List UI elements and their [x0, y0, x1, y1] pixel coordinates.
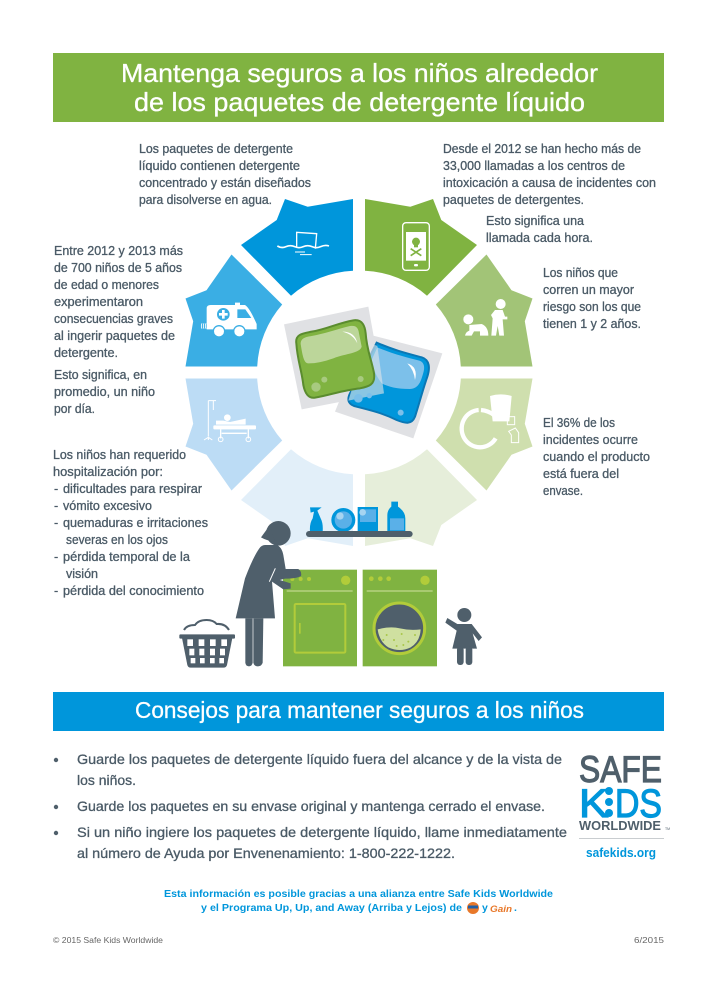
- text: concentrated detergent: Los paquetes de detergente: [139, 142, 293, 156]
- sponsor note: [164, 888, 553, 914]
- text: 700 children: detergente.: [54, 346, 118, 360]
- text: 700 children: experimentaron: [54, 295, 143, 309]
- text: hospitalization list: pérdida temporal de la: [63, 550, 190, 564]
- laundry scene: [179, 521, 482, 668]
- overlap of film on blue pod: [348, 342, 384, 401]
- text: 33,000 calls: Desde el 2012 se han hecho más de: [443, 142, 641, 156]
- icon: ambulance: [201, 303, 257, 338]
- dryer: [283, 570, 357, 666]
- text: concentrated detergent: líquido contienen detergente: [139, 159, 300, 173]
- text: 36 percent: está fuera del: [543, 467, 619, 481]
- text: concentrated detergent: concentrado y están diseñados: [139, 176, 311, 190]
- text: hospitalization list: severas en los ojos: [66, 533, 168, 547]
- plate: [331, 508, 355, 532]
- tips banner: [53, 692, 664, 731]
- text: hospitalization list: hospitalización por:: [53, 465, 163, 479]
- Gain logo: Gain: [490, 904, 513, 914]
- pod: blue: [348, 343, 429, 423]
- copyright: © 2015 Safe Kids Worldwide: [53, 936, 164, 945]
- laundry basket: [179, 620, 235, 668]
- text: hospitalization list: dificultades para respirar: [63, 482, 202, 496]
- text: hospitalization list: [53, 448, 208, 598]
- icon: phone with skull: [403, 223, 429, 270]
- text: hospitalization list: pérdida del conocimiento: [63, 584, 204, 598]
- tips list: Guarde los paquetes en su envase original y mantenga cerrado el envase.: [77, 798, 545, 814]
- text: children at risk: [543, 266, 641, 331]
- woman: [236, 521, 301, 666]
- spray bottle: [310, 507, 323, 532]
- pod: green: [296, 320, 374, 398]
- text: 36 percent: El 36% de los: [543, 416, 615, 430]
- icon: hospital bed: [204, 401, 256, 442]
- segment: palest blue: [241, 449, 353, 546]
- sponsor note: Esta información es posible gracias a una alianza entre Safe Kids Worldwide: [164, 888, 553, 900]
- segment: dark green: [365, 199, 477, 296]
- segment: dark blue: [241, 199, 353, 296]
- Safe Kids logo: SAFE: [579, 748, 662, 790]
- tips list: Si un niño ingiere los paquetes de detergente líquido, llame inmediatamente: [77, 824, 567, 840]
- Safe Kids logo: TM: [665, 827, 670, 831]
- title banner: de los paquetes de detergente líquido: [134, 87, 585, 117]
- text: hospitalization list: vómito excesivo: [63, 499, 152, 513]
- text: hospitalization list: quemaduras e irritaciones: [63, 516, 208, 530]
- Safe Kids logo: DS: [615, 782, 662, 826]
- tips list: los niños.: [77, 772, 136, 788]
- text: 700 children: consecuencias graves: [54, 312, 173, 326]
- text: 700 children: de edad o menores: [54, 278, 159, 292]
- text: children at risk: corren un mayor: [543, 283, 634, 297]
- text: hospitalization list: Los niños han requerido: [53, 448, 186, 462]
- text: 36 percent: envase.: [543, 484, 583, 498]
- text: 33,000 calls: Esto significa una: [486, 214, 584, 228]
- text: 700 children: Esto significa, en: [54, 368, 147, 382]
- text: children at risk: Los niños que: [543, 266, 618, 280]
- Safe Kids logo: safekids.org: [586, 845, 656, 860]
- icon: pie ring and packaging: [462, 394, 519, 447]
- text: hospitalization list: -: [54, 499, 58, 513]
- text: 33,000 calls: paquetes de detergentes.: [443, 193, 584, 207]
- text: 33,000 calls: [443, 142, 656, 245]
- text: 700 children: [54, 244, 183, 416]
- arm gap highlight: [269, 568, 275, 582]
- title banner: [53, 53, 664, 122]
- segment: palest green: [365, 449, 477, 546]
- segment: light green: [436, 378, 532, 490]
- text: 33,000 calls: llamada cada hora.: [486, 231, 593, 245]
- text: concentrated detergent: para disolverse en agua.: [139, 193, 272, 207]
- text: 36 percent: incidentes ocurre: [543, 433, 638, 447]
- small bubbles on the blue pod: [354, 393, 372, 403]
- Tide logo: [467, 902, 479, 914]
- text: hospitalization list: -: [54, 482, 58, 496]
- text: 700 children: promedio, un niño: [54, 385, 155, 399]
- text: hospitalization list: -: [54, 550, 58, 564]
- sponsor note: .: [514, 902, 517, 914]
- text: hospitalization list: visión: [66, 567, 98, 581]
- tips banner: Consejos para mantener seguros a los niños: [135, 697, 584, 723]
- sponsor note: y: [482, 902, 488, 914]
- Safe Kids logo: [579, 748, 670, 860]
- wrapper: blue pod film: [335, 334, 442, 438]
- wheel icons and detergent pods: [201, 223, 519, 537]
- text: children at risk: riesgo son los que: [543, 300, 641, 314]
- tips list: [54, 751, 567, 861]
- text: 33,000 calls: intoxicación a causa de incidentes con: [443, 176, 656, 190]
- shelf with cleaning products: [306, 502, 413, 537]
- Safe Kids logo: K: [579, 782, 608, 826]
- segmented wheel: [186, 199, 532, 546]
- bottle: [387, 502, 405, 532]
- icon: crawling baby and toddler: [463, 299, 507, 336]
- wrapper: green pod film: [284, 307, 384, 409]
- text: hospitalization list: -: [54, 584, 58, 598]
- washing machine: [363, 570, 437, 666]
- text: 700 children: Entre 2012 y 2013 más: [54, 244, 183, 258]
- segment: mid green: [436, 254, 532, 366]
- tips list: Guarde los paquetes de detergente líquido fuera del alcance y de la vista de: [77, 751, 562, 767]
- icon: pod dissolving in water: [277, 232, 329, 255]
- text: 700 children: por día.: [54, 402, 95, 416]
- text: hospitalization list: -: [54, 516, 58, 530]
- title banner: Mantenga seguros a los niños alrededor: [121, 58, 598, 88]
- segment: light blue: [186, 378, 282, 490]
- segment: mid blue: [186, 254, 282, 366]
- shelf board: [306, 531, 413, 537]
- sponsor note: y el Programa Up, Up, and Away (Arriba y Lejos) de: [201, 902, 462, 914]
- date: 6/2015: [634, 936, 665, 945]
- Safe Kids logo: WORLDWIDE: [579, 819, 661, 833]
- child: [445, 608, 482, 665]
- text: 36 percent: cuando el producto: [543, 450, 650, 464]
- tips list: al número de Ayuda por Envenenamiento: 1-800-222-1222.: [77, 845, 455, 861]
- text: 36 percent: [543, 416, 650, 498]
- text: 33,000 calls: 33,000 llamadas a los centros de: [443, 159, 625, 173]
- bag: [358, 507, 378, 533]
- text: 700 children: al ingerir paquetes de: [54, 329, 175, 343]
- text: concentrated detergent: [139, 142, 311, 207]
- text: 700 children: de 700 niños de 5 años: [54, 261, 182, 275]
- text: children at risk: tienen 1 y 2 años.: [543, 317, 641, 331]
